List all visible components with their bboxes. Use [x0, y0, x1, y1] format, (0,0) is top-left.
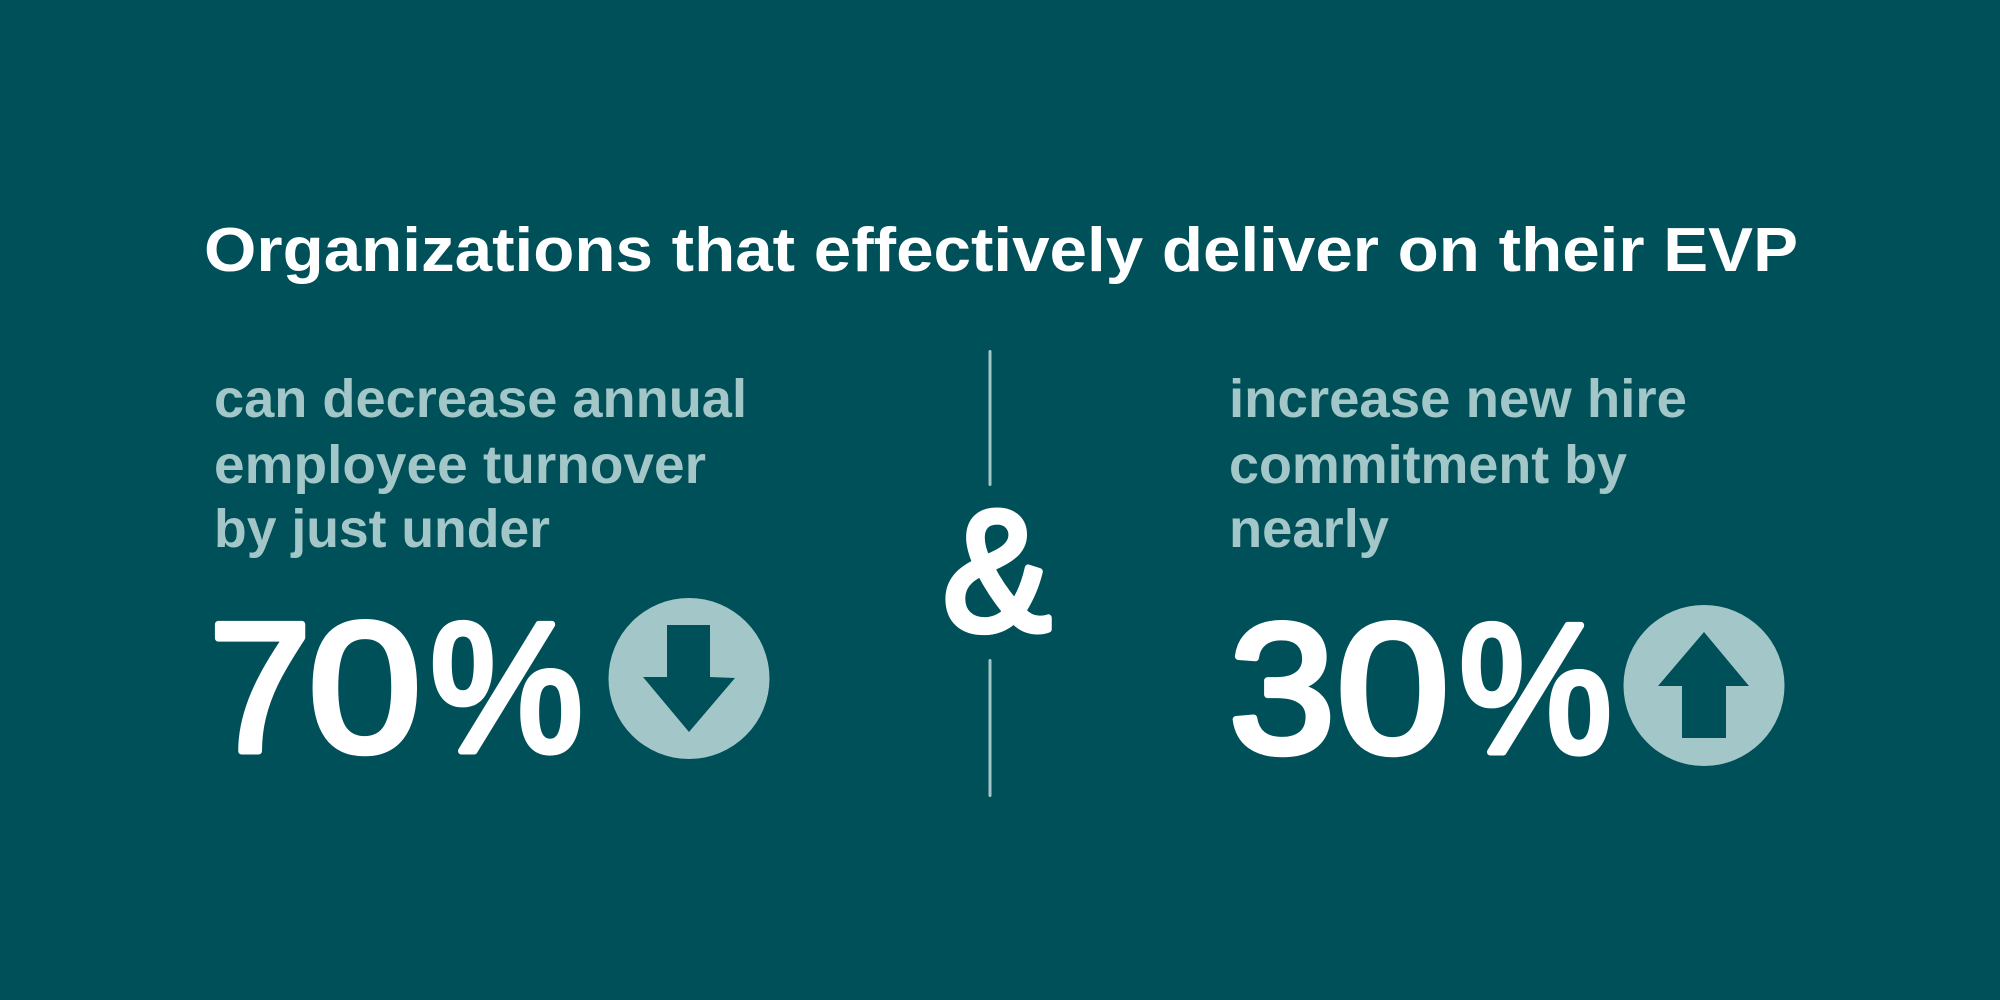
- text block: left description: [214, 369, 747, 559]
- text block: right description: commitment by: [1229, 435, 1627, 495]
- number: 30%: 0: [1336, 585, 1449, 791]
- number: 70%: [209, 584, 583, 790]
- text block: right description: increase new hire: [1229, 369, 1687, 429]
- number: 30%: [1229, 585, 1612, 791]
- ampersand: &: [943, 475, 1051, 667]
- text block: right description: [1229, 369, 1687, 559]
- text block: right description: nearly: [1229, 499, 1389, 559]
- title: Organizations that effectively deliver on their EVP: [204, 216, 1798, 285]
- number: 70%: 7: [209, 584, 311, 790]
- icon: down arrow in circle: [608, 598, 770, 759]
- panel: left statistic: [209, 369, 770, 790]
- text block: left description: employee turnover: [214, 435, 706, 495]
- number: 70%: 0: [308, 584, 421, 790]
- text block: left description: by just under: [214, 499, 550, 559]
- icon: up arrow in circle: [1624, 605, 1784, 766]
- number: 30%: %: [1459, 585, 1612, 791]
- number: 70%: %: [430, 584, 583, 790]
- number: 30%: 3: [1229, 585, 1335, 791]
- divider: upper line: [988, 350, 992, 486]
- divider: lower line: [988, 659, 992, 797]
- text block: left description: can decrease annual: [214, 369, 747, 429]
- panel: right statistic: [1229, 369, 1784, 791]
